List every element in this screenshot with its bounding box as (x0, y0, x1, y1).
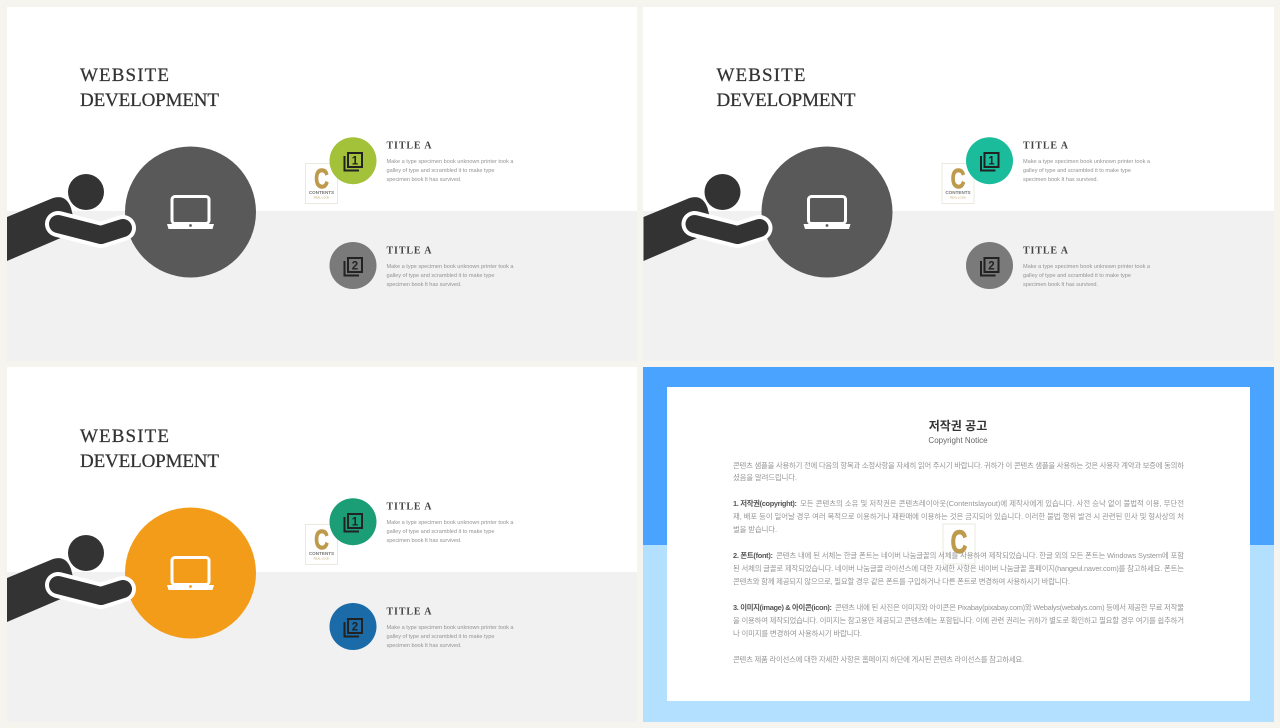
icon: layers 1: 1 (988, 156, 995, 168)
item 2 circle (330, 603, 376, 650)
item 1 text: specimen book It has survived. (386, 538, 462, 544)
item 2 text: Make a type specimen book unknown printer took a (386, 264, 514, 270)
item 2 text: Make a type specimen book unknown printer took a (386, 625, 514, 631)
icon: layers 2 (344, 258, 362, 276)
item 2 text: specimen book It has survived. (1023, 282, 1098, 288)
item 2 title: TITLE A (386, 606, 432, 618)
icon: layers 1: 1 (352, 156, 359, 168)
panel: website development, neutral (7, 7, 637, 361)
watermark logo (942, 164, 974, 204)
paragraph 3: image and icon: 나 이미지를 변경하여 사용하시기 바랍니다. (733, 629, 862, 638)
paragraph 1: copyright: 모든 콘텐츠의 소유 및 저작권은 콘텐츠레이아웃(Contentslayout)에 제작사에게 있습니다. 사전 승낙 없이 불법적 이용, 무단전 (800, 499, 1184, 508)
watermark logo: C (951, 164, 965, 195)
intro paragraph: 셨음을 알려드립니다. (733, 473, 797, 482)
watermark logo: REAL LOOK (314, 196, 330, 200)
item 1 title: TITLE A (386, 502, 432, 512)
watermark logo (306, 164, 338, 204)
item 1 title: TITLE A (386, 140, 432, 152)
item 2 text: specimen book It has survived. (386, 643, 462, 649)
panel: website development, orange (7, 367, 637, 722)
item 1 circle (330, 498, 376, 545)
watermark logo: C (314, 525, 329, 556)
heading: DEVELOPMENT (80, 90, 219, 111)
watermark logo (943, 524, 975, 564)
item 2 text: Make a type specimen book unknown printer took a (1023, 264, 1151, 270)
icon: layers 1: 1 (352, 516, 359, 528)
icon: layers 1 (344, 153, 362, 170)
intro paragraph: 콘텐츠 샘플을 사용하기 전에 다음의 항목과 소정사항을 자세히 읽어 주시기 바랍니다. 귀하가 이 콘텐츠 샘플을 사용하는 것은 사용자 계약과 보증에 동의하 (733, 461, 1184, 470)
heading: DEVELOPMENT (716, 90, 856, 111)
item 1 title: TITLE A (1023, 140, 1069, 152)
paragraph 3: image and icon: 을 이용하여 제작되었습니다. 이미지는 참고용만 제공되고 콘텐츠에는 포함됩니다. 이에 관련 권리는 귀하가 별도로 확인하고 필요할 경우 여기를 쉽추하거 (733, 616, 1184, 625)
icon: laptop (167, 558, 214, 590)
item 2 circle (966, 242, 1013, 289)
heading: DEVELOPMENT (80, 451, 219, 472)
icon: person reaching (644, 174, 760, 261)
paragraph 2: font: 콘텐츠 내에 된 서체는 한글 폰트는 네이버 나눔글꼴의 서체를 사용하여 제작되었습니다. 한글 외의 모든 폰트는 Windows System에 포함 (776, 551, 1184, 560)
item 1 circle (330, 137, 376, 184)
item 2 text: galley of type and scrambled it to make type (386, 273, 494, 279)
paragraph 3: image and icon: 콘텐츠 내에 된 사진은 이미지와 아이콘은 Pixabay(pixabay.com)와 Webalys(webalys.com) 등에서 제공한 무료 저작물 (835, 603, 1184, 612)
item 2 text: galley of type and scrambled it to make type (386, 634, 494, 640)
big circle (125, 508, 256, 638)
paragraph 3: image and icon: 3. 이미지(image) & 아이콘(icon): (733, 603, 832, 612)
item 2 title: TITLE A (1023, 246, 1069, 256)
item 1 text: Make a type specimen book unknown printer took a (386, 520, 514, 526)
heading: WEBSITE (80, 65, 169, 86)
icon: layers 1 (981, 153, 998, 170)
item 2 text: galley of type and scrambled it to make type (1023, 273, 1131, 279)
icon: layers 2 (981, 258, 998, 276)
item 1 text: galley of type and scrambled it to make type (386, 168, 494, 174)
paragraph 2: font: 2. 폰트(font): (733, 551, 773, 560)
paragraph 1: copyright: 1. 저작권(copyright): (733, 499, 797, 508)
icon: layers 2: 2 (988, 260, 995, 272)
item 1 text: Make a type specimen book unknown printer took a (386, 159, 514, 165)
icon: laptop (804, 196, 850, 229)
watermark logo: CONTENTS (309, 190, 334, 195)
item 1 text: galley of type and scrambled it to make type (1023, 168, 1131, 174)
watermark logo: CONTENTS (945, 190, 971, 195)
closing line: 콘텐츠 제품 라이선스에 대한 자세한 사항은 홈페이지 하단에 게시된 콘텐츠 라이선스를 참고하세요. (733, 655, 1024, 664)
paragraph 2: font: 콘텐츠와 함께 제공되지 않으므로, 필요할 경우 같은 폰트를 구입하거나 다른 폰트로 변경하여 사용하시기 바랍니다. (733, 577, 1070, 586)
item 1 text: Make a type specimen book unknown printer took a (1023, 159, 1151, 165)
icon: layers 2: 2 (352, 622, 358, 634)
icon: layers 2: 2 (352, 260, 358, 272)
notice title: 저작권 공고 (929, 418, 987, 433)
panel: website development, teal (643, 7, 1274, 361)
watermark logo: C (314, 164, 329, 195)
notice subtitle: Copyright Notice (928, 436, 988, 445)
paragraph 2: font: 된 서체의 글꼴로 제작되었습니다. 네이버 나눔글꼴 라이선스에 대한 자세한 사항은 네이버 나눔글꼴 홈페이지(hangeul.naver.com)를 참고하세요. 폰트는 (733, 564, 1184, 573)
icon: layers 1 (344, 514, 362, 532)
item 2 title: TITLE A (386, 246, 432, 256)
big circle (762, 146, 892, 278)
watermark logo: REAL LOOK (950, 196, 966, 200)
icon: laptop (167, 196, 214, 229)
panel: copyright notice (643, 367, 1274, 722)
item 1 text: specimen book It has survived. (386, 177, 462, 183)
item 1 circle (966, 137, 1013, 184)
item 1 text: specimen book It has survived. (1023, 177, 1098, 183)
watermark logo: C (951, 524, 967, 560)
watermark logo: REAL LOOK (314, 556, 330, 560)
watermark logo: CONTENTS (309, 551, 334, 556)
big circle (125, 146, 256, 278)
paragraph 1: copyright: 재, 배포 등이 일어날 경우 여러 목적으로 이용하거나 재판매에 이용하는 것은 금지되어 있습니다. 이러한 불법 행위 발견 시 관련된 민사 및 형사상의 처 (733, 512, 1184, 521)
icon: person reaching (7, 535, 123, 622)
item 2 circle (330, 242, 376, 289)
heading: WEBSITE (716, 65, 806, 86)
paragraph 1: copyright: 벌을 받습니다. (733, 525, 777, 534)
icon: person reaching (7, 174, 123, 261)
heading: WEBSITE (80, 426, 169, 447)
item 2 text: specimen book It has survived. (386, 282, 462, 288)
icon: layers 2 (344, 619, 362, 636)
watermark logo (306, 524, 338, 564)
item 1 text: galley of type and scrambled it to make type (386, 529, 494, 535)
